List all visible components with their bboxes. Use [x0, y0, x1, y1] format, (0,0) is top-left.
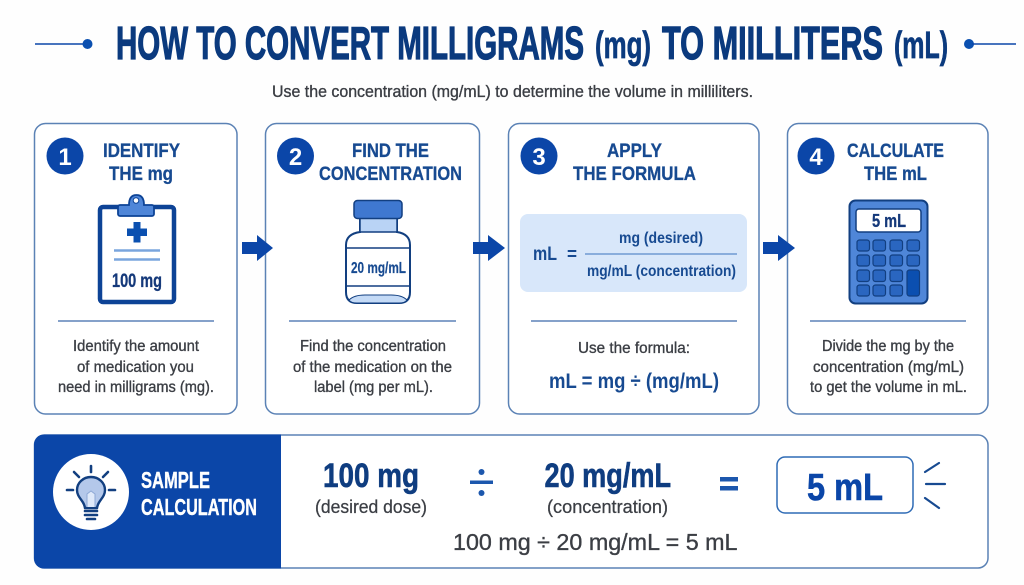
description: step 1: need in milligrams (mg).	[58, 379, 214, 396]
result sparkle rays	[925, 463, 945, 508]
step number 2	[277, 138, 314, 174]
description: step 4: Divide the mg by the	[822, 338, 954, 355]
step number 2: 2	[289, 144, 302, 171]
division sign	[470, 469, 493, 496]
heading: find the concentration	[319, 141, 462, 185]
title ornament: left	[35, 39, 92, 49]
description: step 1: Identify the amount	[73, 338, 200, 355]
description: step 2: of the medication on the	[293, 359, 452, 376]
step number 3	[520, 138, 558, 174]
heading: identify the mg: THE mg	[109, 164, 173, 185]
panel: step 1 identify the mg	[34, 124, 237, 414]
heading: apply the formula	[573, 141, 696, 185]
description: step 3: Use the formula:	[578, 340, 690, 357]
heading: find the concentration: CONCENTRATION	[319, 164, 462, 185]
heading: calculate the mL	[847, 141, 944, 185]
concentration value	[544, 457, 671, 517]
step number 1	[46, 138, 84, 174]
concentration value: (concentration)	[547, 497, 668, 517]
icon: calculator	[850, 200, 928, 304]
panel: sample calculation	[34, 434, 988, 568]
icon: clipboard	[100, 195, 174, 302]
panel: step 2 find the concentration	[266, 124, 480, 414]
title: HOW TO CONVERT MILLIGRAMS	[116, 17, 584, 69]
formula box: mg (desired)	[619, 230, 703, 247]
calculation summary: 100 mg ÷ 20 mg/mL = 5 mL	[453, 529, 738, 555]
title: (mg)	[595, 25, 651, 67]
arrow: step 1 to 2	[242, 235, 273, 261]
icon: calculator: 5 mL	[872, 211, 906, 231]
desired dose value: 100 mg	[323, 457, 419, 495]
panel: step 3 apply the formula	[508, 124, 759, 414]
formula box: mg/mL (concentration)	[587, 263, 736, 280]
step number 4: 4	[809, 144, 823, 171]
result box	[777, 457, 913, 513]
result box: 5 mL	[807, 467, 883, 509]
banner label: SAMPLE	[141, 467, 210, 493]
panel: step 4 calculate the mL	[788, 124, 988, 414]
subtitle: Use the concentration (mg/mL) to determine the volume in milliliters.	[272, 83, 753, 101]
description: step 1	[58, 338, 214, 396]
heading: apply the formula: APPLY	[607, 141, 662, 162]
description: step 4	[810, 338, 967, 396]
step number 3: 3	[532, 144, 546, 171]
icon: clipboard: 100 mg	[112, 271, 162, 292]
equals sign	[720, 477, 738, 490]
banner label: CALCULATION	[141, 494, 257, 520]
icon: vial: 20 mg/mL	[351, 260, 406, 277]
title ornament: right	[964, 39, 1016, 49]
title: TO MIILLITERS	[662, 17, 883, 69]
icon: vial	[346, 200, 410, 303]
description: step 2: Find the concentration	[300, 338, 446, 355]
description: step 1: of medication you	[77, 359, 194, 376]
step number 1: 1	[58, 144, 72, 171]
title: (mL)	[894, 25, 948, 67]
banner label	[141, 467, 257, 520]
concentration value: 20 mg/mL	[544, 457, 671, 495]
heading: calculate the mL: THE mL	[864, 164, 927, 185]
description: step 2	[293, 338, 452, 396]
formula box	[520, 214, 747, 292]
desired dose value	[315, 457, 427, 517]
arrow: step 2 to 3	[473, 235, 505, 261]
description: step 2: label (mg per mL).	[314, 379, 433, 396]
heading: identify the mg: IDENTIFY	[103, 141, 180, 162]
step number 4	[798, 138, 834, 174]
description: step 3: mL = mg ÷ (mg/mL)	[549, 370, 719, 393]
heading: identify the mg	[103, 141, 180, 185]
sample calculation banner	[34, 434, 281, 568]
description: step 4: concentration (mg/mL)	[813, 359, 964, 376]
heading: calculate the mL: CALCULATE	[847, 141, 944, 162]
formula box: =	[567, 244, 577, 264]
icon: light bulb	[53, 454, 129, 530]
description: step 3	[549, 340, 719, 393]
formula box: mL	[533, 244, 557, 265]
heading: find the concentration: FIND THE	[352, 141, 429, 162]
arrow: step 3 to 4	[763, 235, 795, 261]
desired dose value: (desired dose)	[315, 497, 427, 517]
heading: apply the formula: THE FORMULA	[573, 164, 696, 185]
description: step 4: to get the volume in mL.	[810, 379, 967, 396]
